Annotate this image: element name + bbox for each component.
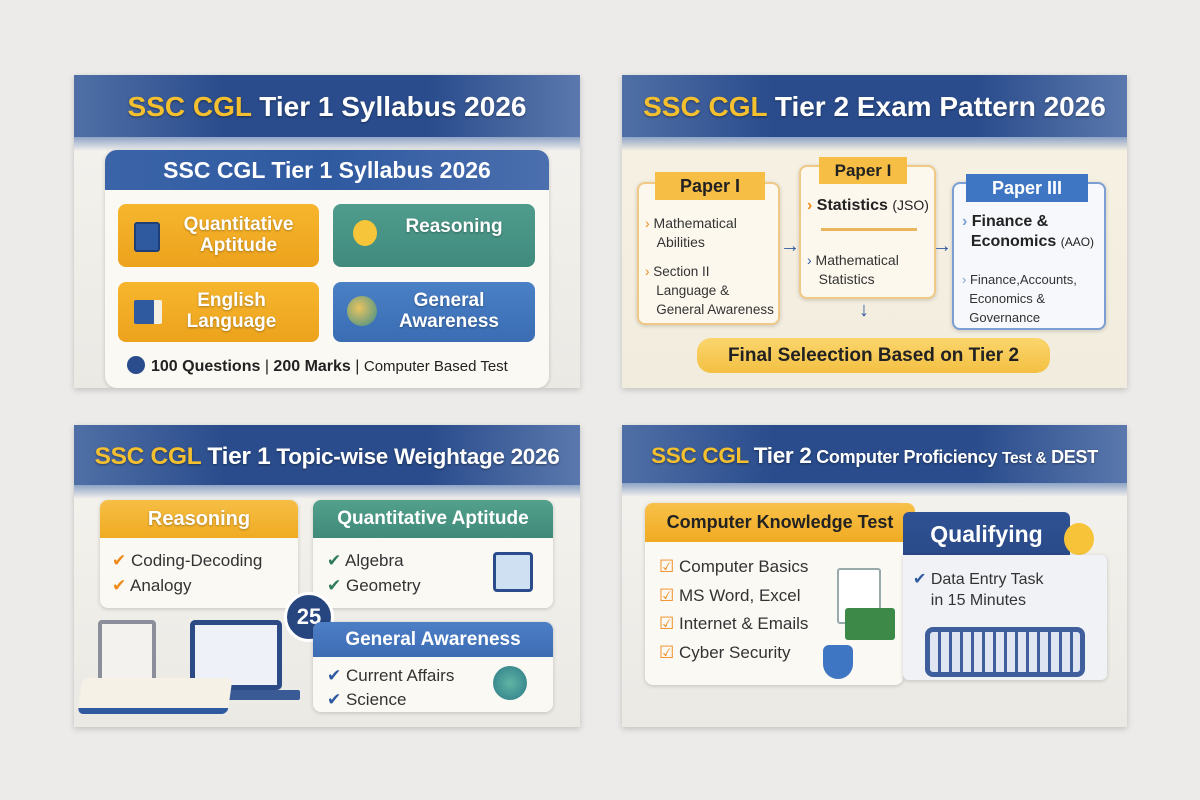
clipboard (98, 620, 156, 690)
laptop (190, 620, 282, 690)
header band (74, 75, 580, 137)
title: SSC CGL Tier 1 Syllabus 2026 (128, 91, 526, 122)
title: SSC CGL Tier 2 Computer Proficiency Test & DEST (651, 443, 1098, 468)
label: Quantitative Aptitude (337, 508, 529, 529)
icon: calculator (134, 222, 160, 252)
box: reasoning: ✔ Coding-Decoding (112, 551, 262, 570)
icon: globe (347, 296, 377, 326)
panel: tier 2 exam pattern (622, 75, 1127, 388)
box: computer knowledge test: ☑ Internet & Emails (659, 614, 808, 633)
box: general awareness: ✔ Science (327, 690, 406, 709)
label (645, 503, 915, 542)
box: reasoning (100, 500, 298, 608)
box: data entry: ✔ Data Entry Task (913, 571, 1044, 588)
icon: monitor (493, 552, 533, 592)
box: paper III: › Finance,Accounts, (962, 272, 1077, 287)
banner: final selection (697, 338, 1050, 373)
label: Paper I (680, 176, 740, 196)
header band (622, 75, 1127, 137)
inner heading: SSC CGL Tier 1 Syllabus 2026 (163, 157, 491, 183)
box: computer knowledge test: ☑ MS Word, Excel (659, 586, 801, 604)
box: paper I (statistics): Statistics (819, 271, 875, 287)
tile: general awareness (333, 282, 535, 342)
tile: reasoning (333, 204, 535, 267)
arrow: → (780, 235, 800, 257)
box: computer knowledge test: ☑ Cyber Security (659, 642, 790, 662)
box: paper III: Economics & (969, 291, 1045, 306)
illustration: desk with laptop and book (78, 620, 300, 714)
label: Paper I (835, 161, 891, 180)
header band (622, 425, 1127, 483)
header band (74, 425, 580, 485)
label: qualifying (903, 512, 1070, 556)
inner heading (105, 150, 549, 190)
box: quantitative aptitude: ✔ Geometry (327, 576, 421, 595)
label (100, 500, 298, 538)
label: Reasoning (148, 508, 250, 530)
box: paper I: Language & (656, 283, 729, 298)
icon: bulb (1064, 523, 1094, 555)
box: paper I: › Section II (645, 264, 710, 279)
text (645, 215, 737, 250)
book (77, 678, 233, 714)
tile: general awareness: Awareness (399, 311, 499, 332)
box: data entry: in 15 Minutes (931, 592, 1026, 609)
icon: documents (837, 568, 881, 624)
label (655, 172, 765, 200)
banner: final selection: Final Seleection Based on Tier 2 (728, 345, 1019, 366)
box: quantitative aptitude: ✔ Algebra (327, 551, 404, 570)
badge: 25: 25 (297, 604, 321, 629)
box: paper I (statistics) (799, 165, 936, 299)
box: paper III: Economics (AAO) (971, 233, 1094, 250)
badge: 25 (284, 592, 334, 642)
arrow down: ↓ (859, 299, 869, 321)
label (819, 157, 907, 184)
box: paper I (statistics): › Mathematical (807, 252, 899, 268)
tile: quantitative aptitude: Quantitative (184, 214, 293, 235)
label: Paper III (992, 178, 1062, 198)
box: paper III (952, 182, 1106, 330)
box: paper I (statistics): › Statistics (JSO) (807, 197, 929, 214)
panel: computer proficiency test (622, 425, 1127, 727)
footer text: 100 Questions | 200 Marks | Computer Based Test (151, 358, 508, 375)
box: paper III: Governance (969, 310, 1040, 325)
panel: tier 1 syllabus (74, 75, 580, 388)
label (313, 500, 553, 538)
label: General Awareness (345, 629, 521, 650)
label (313, 622, 553, 657)
title: SSC CGL Tier 1 Topic-wise Weightage 2026 (95, 443, 559, 470)
title: SSC CGL Tier 2 Exam Pattern 2026 (643, 91, 1106, 122)
icon: keyboard (925, 627, 1085, 677)
tile: english: Language (187, 311, 276, 332)
panel: topic-wise weightage (74, 425, 580, 727)
box: computer knowledge test: ☑ Computer Basics (659, 557, 808, 576)
box: computer knowledge test (645, 503, 903, 685)
arrow: → (932, 235, 952, 257)
text: Abilities (657, 234, 705, 250)
box: general awareness: ✔ Current Affairs (327, 666, 454, 685)
box: general awareness (313, 622, 553, 712)
icon: globe (493, 666, 527, 700)
tile: quantitative aptitude: Aptitude (200, 235, 277, 256)
label: qualifying: Qualifying (930, 521, 1043, 547)
tile: english (118, 282, 319, 342)
box: reasoning: ✔ Analogy (112, 576, 191, 595)
box: quantitative aptitude (313, 500, 553, 608)
tile: general awareness: General (414, 290, 484, 311)
icon: shield (823, 645, 853, 679)
tile: english: English (197, 290, 266, 311)
tile: quantitative aptitude (118, 204, 319, 267)
inner panel (105, 150, 549, 388)
box: paper I (637, 182, 780, 325)
text: › Mathematical (645, 215, 737, 231)
icon: book (134, 300, 162, 324)
icon: bulb (353, 220, 377, 246)
box: paper I: General Awareness (656, 302, 774, 317)
label (966, 174, 1088, 202)
tile: reasoning: Reasoning (405, 216, 503, 237)
box: data entry (903, 555, 1107, 680)
box: paper III: › Finance & (962, 213, 1048, 230)
label: Computer Knowledge Test (667, 512, 893, 532)
